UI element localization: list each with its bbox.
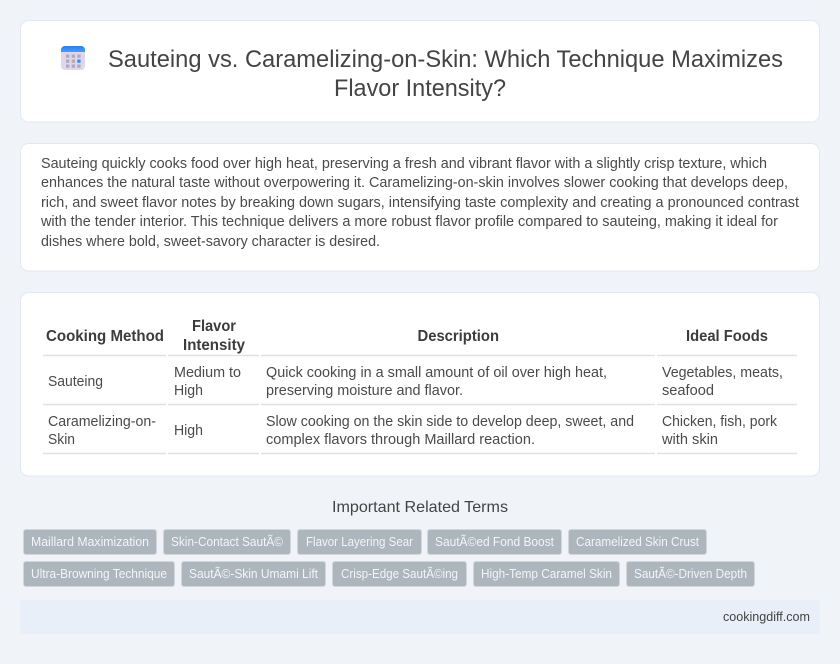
table row: sauteing: Medium to bbox=[174, 365, 241, 381]
table row: caramelizing-on-skin: Caramelizing-on- bbox=[48, 414, 156, 430]
table row: caramelizing-on-skin: Skin bbox=[48, 432, 75, 448]
related terms chips: SautÃ©ed Fond Boost bbox=[435, 535, 554, 549]
related terms chips: Crisp-Edge SautÃ©ing bbox=[341, 567, 458, 581]
table header: Ideal Foods bbox=[686, 328, 768, 345]
table row: caramelizing-on-skin: complex flavors through Maillard reaction. bbox=[266, 432, 535, 448]
table header: Intensity bbox=[183, 337, 245, 354]
text block: description: rich, and sweet flavor notes by breaking down sugars, intensifying taste complexity and creating a pronounced contrast bbox=[41, 195, 799, 211]
footer bar: cookingdiff.com bbox=[723, 610, 810, 624]
panel: title card bbox=[20, 20, 820, 122]
table row: caramelizing-on-skin: High bbox=[174, 423, 203, 439]
table row: caramelizing-on-skin: Slow cooking on the skin side to develop deep, sweet, and bbox=[266, 414, 634, 430]
panel: description card bbox=[20, 144, 820, 271]
table row: sauteing: preserving moisture and flavor. bbox=[266, 383, 463, 399]
footer bar bbox=[20, 600, 820, 634]
related terms chips: SautÃ©-Driven Depth bbox=[634, 567, 747, 581]
table row: sauteing: seafood bbox=[662, 383, 714, 399]
table header: Cooking Method bbox=[46, 328, 164, 345]
icon: calendar bbox=[61, 46, 85, 70]
table row: caramelizing-on-skin: Chicken, fish, pork bbox=[662, 414, 778, 430]
heading: title: Sauteing vs. Caramelizing-on-Skin: Which Technique Maximizes bbox=[108, 46, 783, 73]
table row: sauteing: Sauteing bbox=[48, 374, 103, 390]
table row: sauteing: Quick cooking in a small amount of oil over high heat, bbox=[266, 365, 607, 381]
text block: description: enhances the natural taste without overpowering it. Caramelizing-on-skin involves slower cooking that develops deep, bbox=[41, 175, 788, 191]
text block: description bbox=[40, 156, 799, 250]
text block: description: dishes where bold, sweet-savory character is desired. bbox=[41, 234, 380, 250]
table row: sauteing: Vegetables, meats, bbox=[662, 365, 783, 381]
text block: description: with the tender interior. This technique delivers a more robust flavor profile compared to sauteing, making it ideal for bbox=[40, 214, 778, 230]
related terms chips: Flavor Layering Sear bbox=[306, 535, 413, 549]
related terms chips: High-Temp Caramel Skin bbox=[481, 567, 612, 581]
related terms chips: SautÃ©-Skin Umami Lift bbox=[189, 567, 318, 581]
table header: Flavor bbox=[192, 318, 236, 335]
related terms chips: Skin-Contact SautÃ© bbox=[171, 535, 284, 549]
text block: description: Sauteing quickly cooks food over high heat, preserving a fresh and vibrant flavor with a slightly crisp texture, which bbox=[41, 156, 767, 172]
table row: sauteing: High bbox=[174, 383, 203, 399]
heading: title bbox=[108, 46, 783, 102]
table row: caramelizing-on-skin bbox=[48, 414, 778, 448]
related terms chips: Ultra-Browning Technique bbox=[31, 567, 167, 581]
table header bbox=[46, 318, 768, 354]
table row: sauteing bbox=[48, 365, 783, 399]
panel: comparison table bbox=[20, 292, 820, 476]
heading: important related terms: Important Related Terms bbox=[332, 499, 508, 516]
related terms chips: Caramelized Skin Crust bbox=[576, 535, 699, 549]
related terms chips bbox=[24, 530, 754, 586]
table row: caramelizing-on-skin: with skin bbox=[661, 432, 718, 448]
related terms chips: Maillard Maximization bbox=[31, 535, 149, 549]
heading: title: Flavor Intensity? bbox=[334, 75, 506, 102]
table header: Description bbox=[418, 328, 499, 345]
